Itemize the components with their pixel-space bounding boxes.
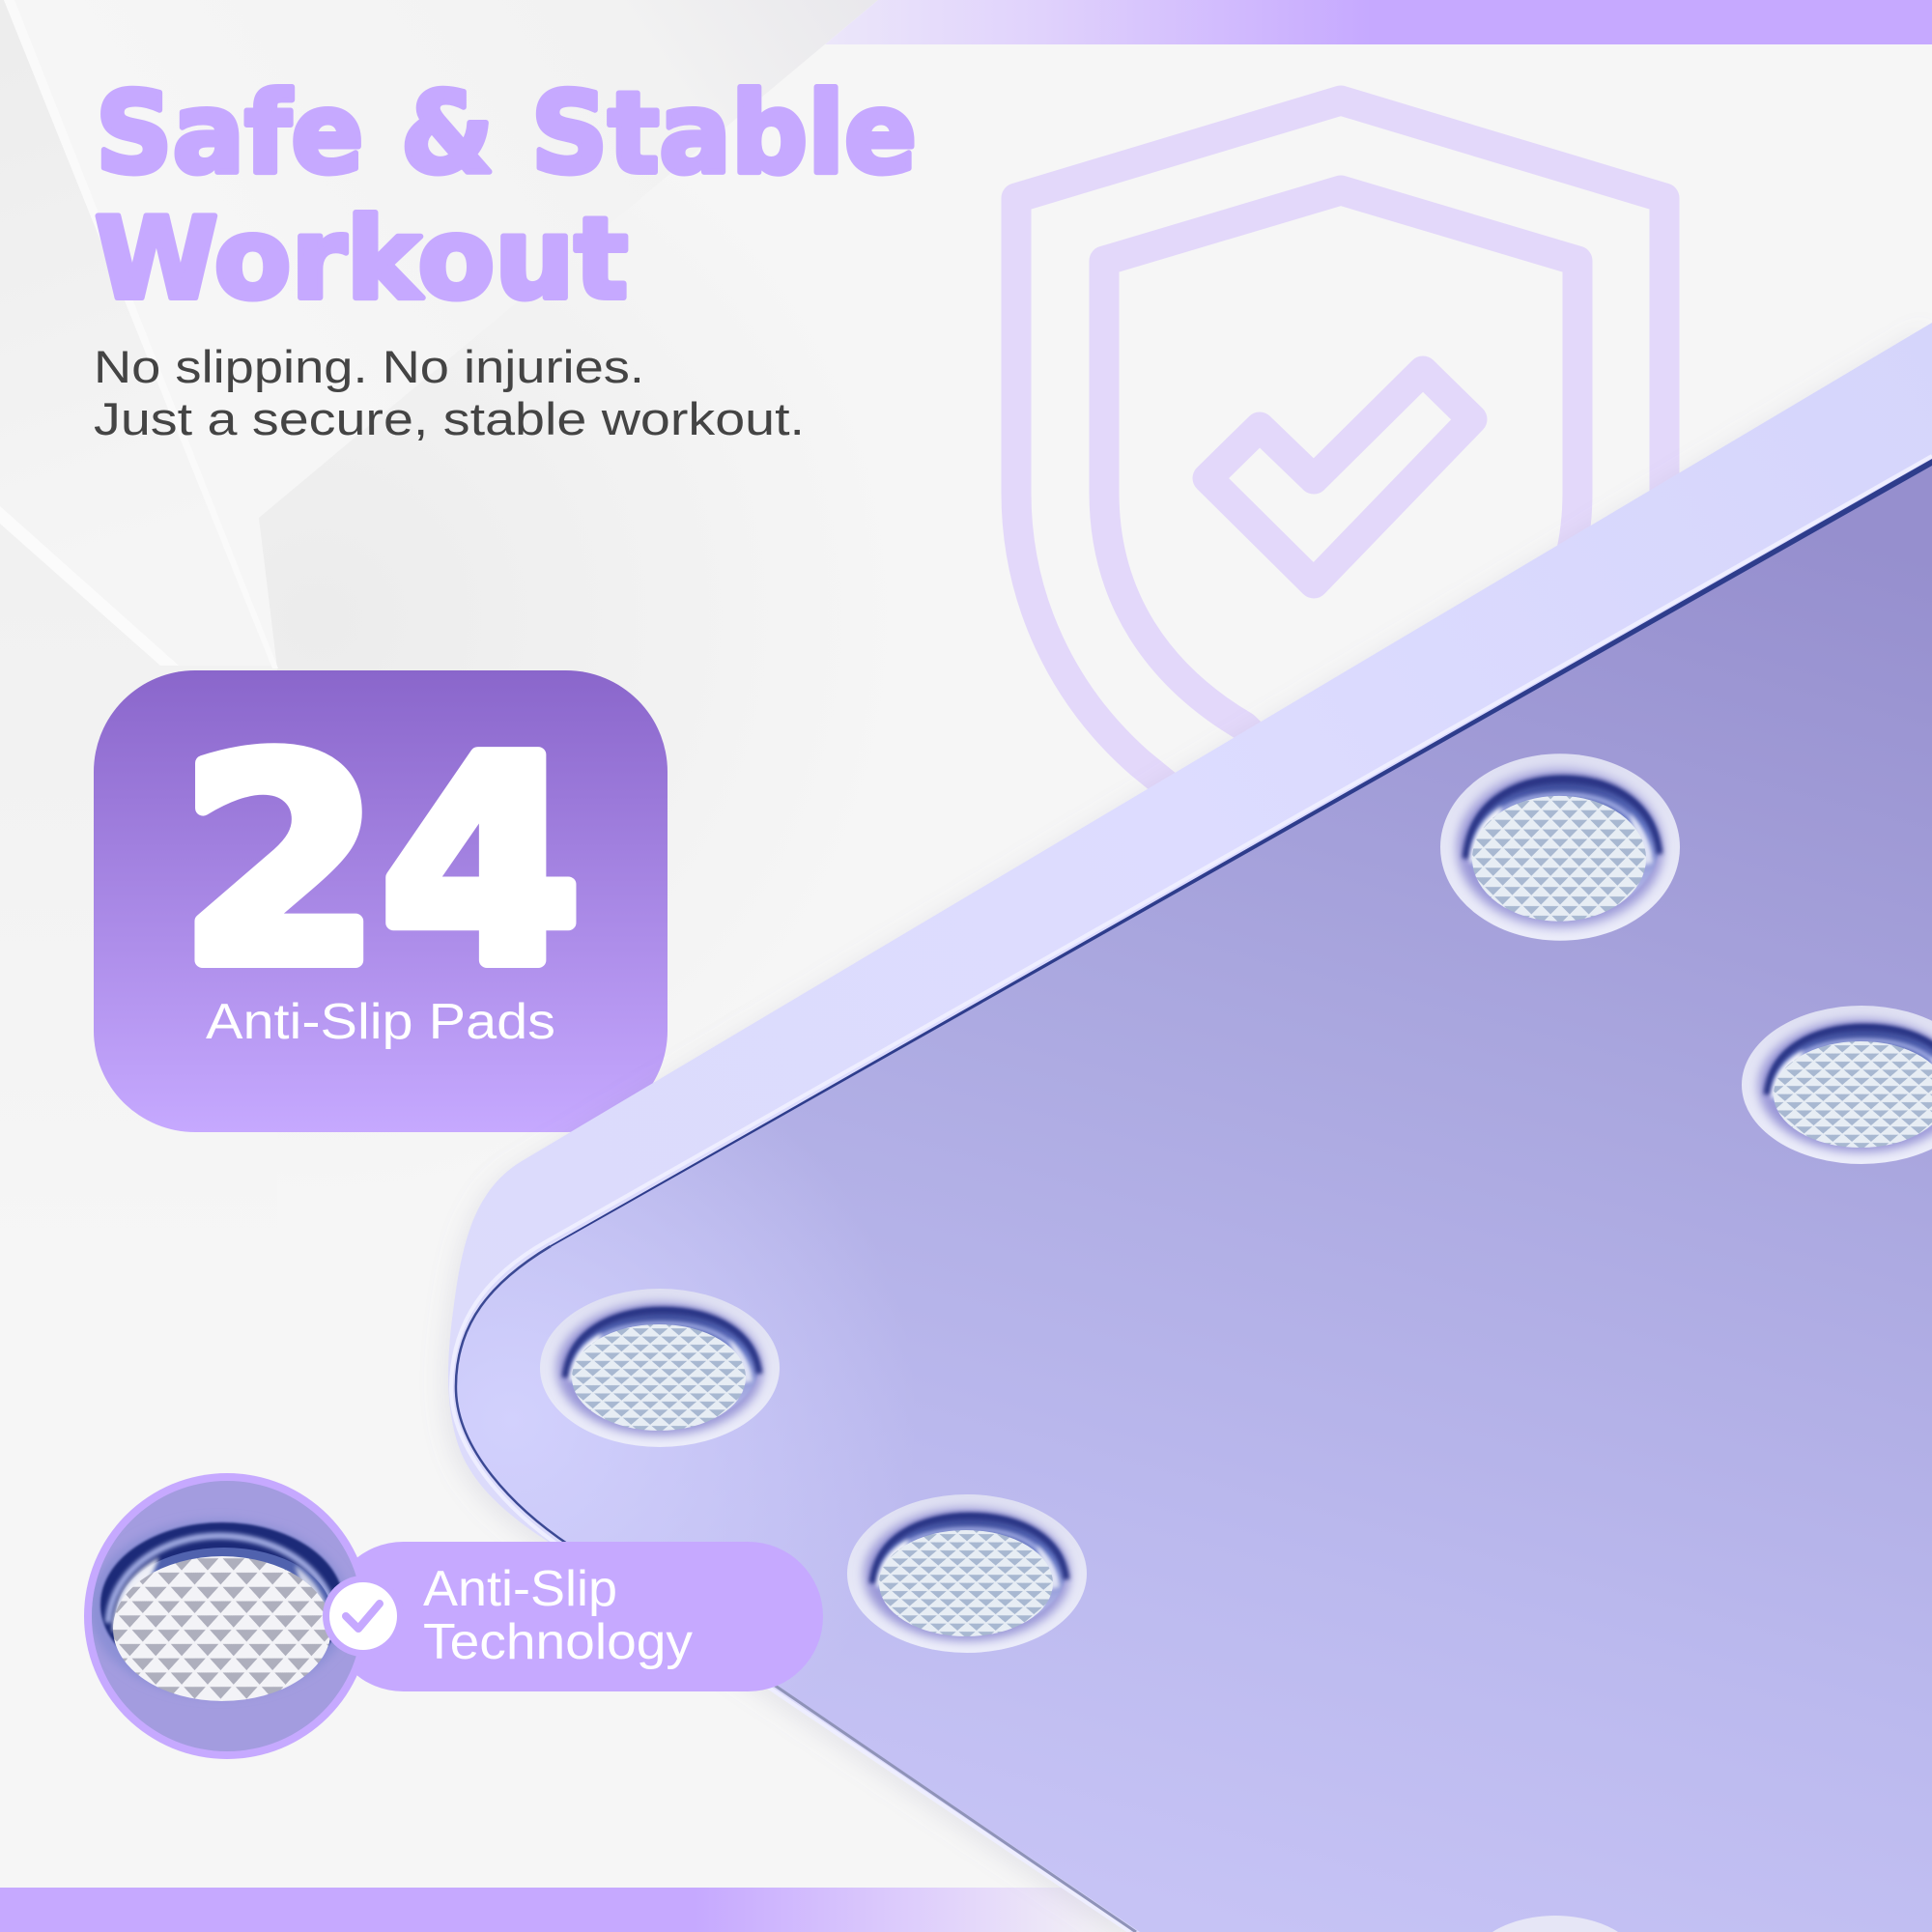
product: exercise board underside <box>448 323 1932 1932</box>
stat badge: 24 anti-slip pads <box>94 670 668 1132</box>
callout text: Anti-Slip <box>423 1561 617 1617</box>
subheading: No slipping. No injuries. <box>94 341 644 392</box>
subheading: Just a secure, stable workout. <box>94 393 805 444</box>
board rim <box>448 323 1932 1932</box>
bottom accent bar <box>0 1888 1121 1932</box>
callout text <box>423 1561 693 1670</box>
callout: anti-slip technology <box>84 1473 823 1759</box>
anti-slip pad 1 <box>1440 753 1680 941</box>
magnified pad circle <box>84 1473 370 1759</box>
board plate <box>456 462 1932 1932</box>
top accent bar <box>825 0 1932 44</box>
heading <box>95 69 917 325</box>
anti-slip pad 2 <box>1742 1006 1932 1164</box>
anti-slip pad 3 <box>540 1289 780 1447</box>
heading: Safe & Stable <box>96 69 917 199</box>
icon: check badge <box>323 1576 404 1657</box>
icon: shield watermark <box>1016 100 1664 927</box>
stat number: 24 <box>180 698 582 1027</box>
anti-slip pad 5 <box>1492 1916 1618 1932</box>
anti-slip pad 4 <box>847 1494 1087 1653</box>
plate edge line <box>551 459 1932 1247</box>
callout pill <box>328 1542 823 1691</box>
rim highlight line <box>451 456 1932 1932</box>
stat label: Anti-Slip Pads <box>206 994 555 1050</box>
heading: Workout <box>95 194 628 325</box>
subheading <box>94 341 805 444</box>
callout text: Technology <box>423 1614 693 1670</box>
